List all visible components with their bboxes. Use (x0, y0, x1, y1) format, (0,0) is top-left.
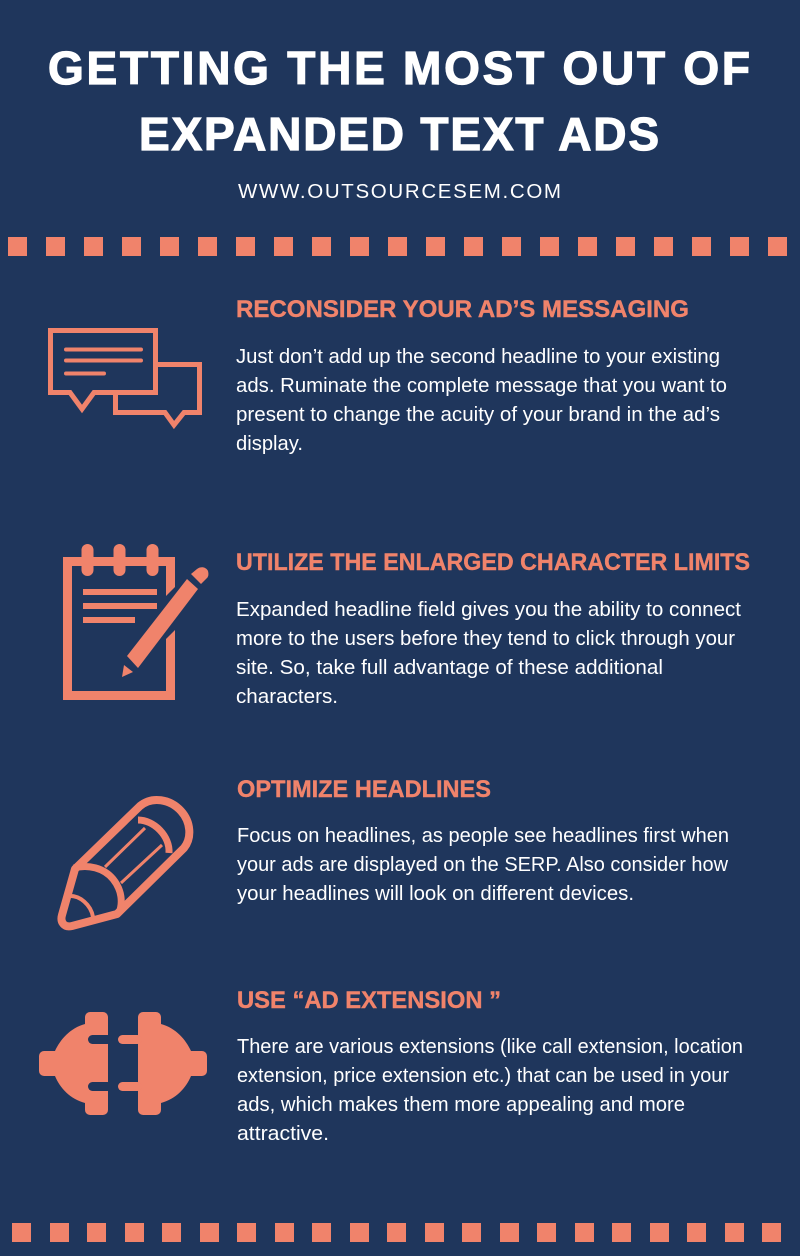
body text: extension, price extension etc.) that can be used in your (237, 1065, 729, 1087)
panel: reconsider messaging (50, 296, 727, 455)
body text: your ads are displayed on the SERP. Also consider how (237, 854, 729, 876)
body text: present to change the acuity of your brand in the ad’s (236, 404, 720, 426)
body text: display. (236, 433, 303, 455)
body text: Focus on headlines, as people see headlines first when (237, 825, 729, 847)
body text (236, 346, 727, 455)
title: GETTING THE MOST OUT OF (48, 42, 750, 94)
title: EXPANDED TEXT ADS (139, 108, 659, 160)
icon: plug (39, 1012, 207, 1115)
body text (236, 599, 741, 708)
body text: There are various extensions (like call extension, location (237, 1036, 743, 1058)
panel: ad extension (39, 987, 743, 1145)
heading: USE “AD EXTENSION ” (237, 987, 501, 1014)
heading: UTILIZE THE ENLARGED CHARACTER LIMITS (236, 549, 750, 576)
bottom dotted divider (12, 1223, 781, 1242)
body text: ads, which makes them more appealing and more (237, 1094, 685, 1116)
icon: pencil (61, 800, 189, 926)
body text: attractive. (237, 1123, 329, 1145)
body text: your headlines will look on different devices. (237, 883, 634, 905)
heading: RECONSIDER YOUR AD’S MESSAGING (236, 296, 689, 323)
website url: WWW.OUTSOURCESEM.COM (238, 180, 561, 203)
body text: ads. Ruminate the complete message that you want to (236, 375, 727, 397)
panel: character limits (63, 544, 750, 708)
heading: OPTIMIZE HEADLINES (237, 776, 491, 803)
body text: characters. (236, 686, 338, 708)
body text: more to the users before they tend to click through your (236, 628, 735, 650)
icon: speech bubbles (50, 330, 200, 425)
top dotted divider (8, 237, 787, 256)
body text (237, 825, 729, 905)
panel: optimize headlines (61, 776, 729, 926)
icon: notepad and pen (63, 544, 208, 700)
title (48, 42, 750, 160)
body text: site. So, take full advantage of these additional (236, 657, 663, 679)
body text (237, 1036, 743, 1145)
body text: Just don’t add up the second headline to your existing (236, 346, 720, 368)
body text: Expanded headline field gives you the ability to connect (236, 599, 741, 621)
